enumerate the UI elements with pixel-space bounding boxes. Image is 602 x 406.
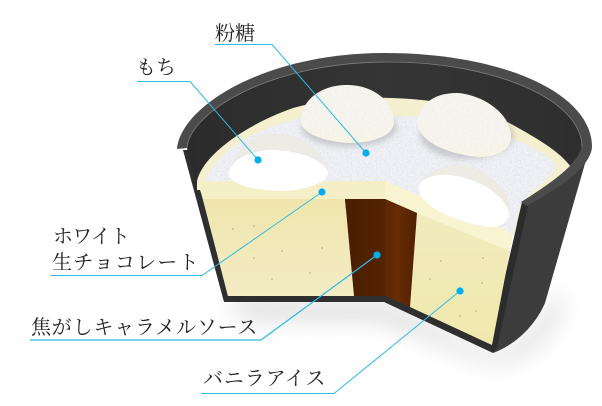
white chocolate top surface xyxy=(197,98,571,236)
cut face: white chocolate layer xyxy=(197,181,513,251)
cup: rim xyxy=(177,53,592,206)
powdered sugar xyxy=(206,116,557,235)
mochi: cut front right xyxy=(419,165,510,227)
label: ホワイト生チョコレート: ホワイト xyxy=(53,226,129,248)
label: バニラアイス xyxy=(201,287,464,394)
mochi: cut left xyxy=(229,133,328,191)
cup: outer wall xyxy=(183,150,586,353)
label: ホワイト生チョコレート: 生チョコレート xyxy=(52,251,200,274)
label: 粉糖: 粉糖 xyxy=(215,22,255,45)
label: 焦がしキャラメルソース xyxy=(30,251,381,340)
cut face: caramel sauce xyxy=(345,199,417,307)
cast shadow xyxy=(230,292,562,362)
label: もち: もち xyxy=(136,57,176,79)
label: もち xyxy=(136,57,262,164)
cut face: vanilla ice cream xyxy=(203,199,510,345)
label: ホワイト生チョコレート xyxy=(51,188,326,276)
label: 粉糖 xyxy=(215,22,370,157)
mochi: back right xyxy=(418,93,514,159)
cup: interior wall xyxy=(187,62,582,215)
label: 焦がしキャラメルソース: 焦がしキャラメルソース xyxy=(31,316,258,339)
label: バニラアイス: バニラアイス xyxy=(203,368,326,390)
mochi: back centre xyxy=(301,85,397,147)
